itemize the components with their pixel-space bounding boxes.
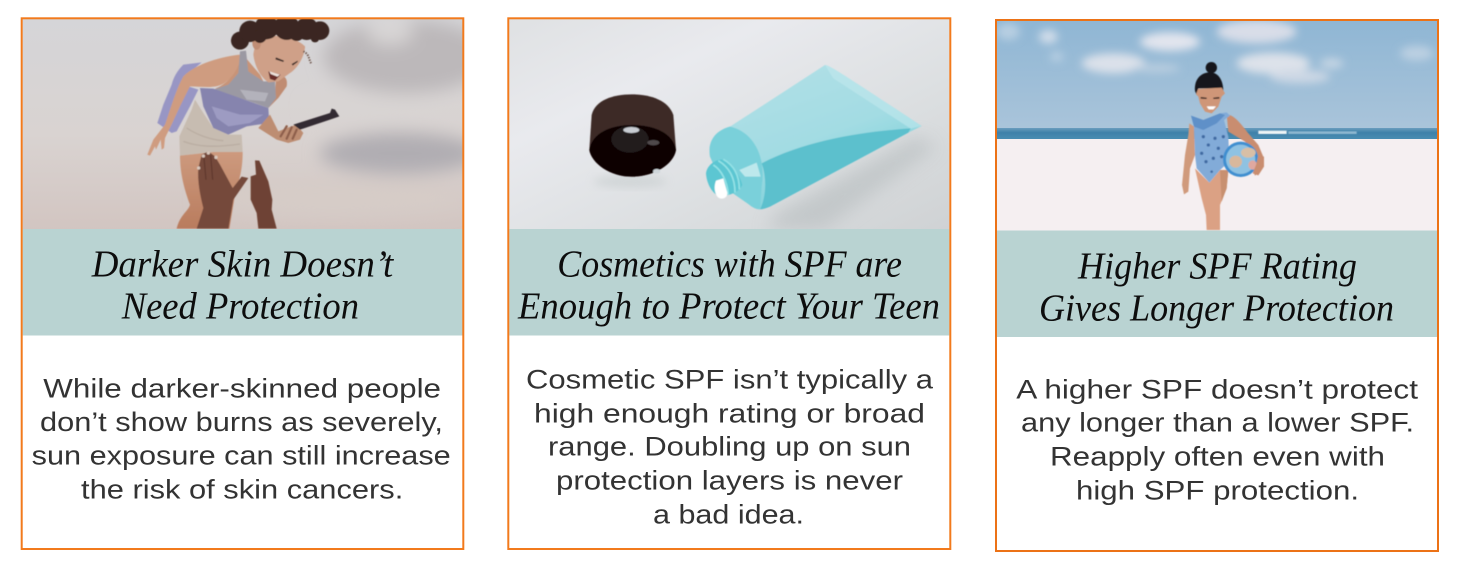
photo: smiling girl on the beach with a ball	[997, 20, 1438, 231]
body text: higher SPF	[1016, 374, 1419, 506]
panel: higher SPF myth	[996, 20, 1438, 551]
heading: cosmetics with SPF: Cosmetics with SPF are	[557, 244, 902, 286]
body text: darker skin: sun exposure can still increase	[32, 440, 451, 470]
card border	[996, 20, 1438, 551]
heading: cosmetics with SPF: Enough to Protect Your Teen	[517, 286, 940, 328]
body text: darker skin: While darker-skinned people	[43, 373, 441, 403]
photo: laughing child lifted by an adult's hands	[22, 15, 490, 230]
heading band	[509, 229, 949, 336]
heading band	[23, 229, 463, 336]
body text: cosmetics with SPF: protection layers is never	[556, 465, 903, 495]
body text: cosmetics with SPF: high enough rating or broad	[534, 398, 925, 428]
heading: darker skin: Darker Skin Doesn’t	[91, 244, 395, 286]
heading: higher SPF: Higher SPF Rating	[1077, 245, 1357, 287]
card border	[22, 18, 463, 549]
heading: cosmetics with SPF	[517, 244, 940, 328]
heading: darker skin: Need Protection	[121, 285, 359, 327]
body text: cosmetics with SPF: range. Doubling up on sun	[548, 432, 911, 462]
body text: cosmetics with SPF: Cosmetic SPF isn’t typically a	[526, 364, 933, 394]
card border	[508, 18, 950, 549]
body text: higher SPF: Reapply often even with	[1050, 442, 1385, 472]
body text: darker skin	[32, 373, 451, 504]
body text: cosmetics with SPF: a bad idea.	[653, 499, 804, 529]
heading: higher SPF: Gives Longer Protection	[1039, 288, 1394, 330]
body text: darker skin: the risk of skin cancers.	[81, 474, 403, 504]
body text: darker skin: don’t show burns as severely,	[40, 407, 443, 437]
heading: darker skin	[91, 244, 395, 327]
body text: cosmetics with SPF	[526, 364, 933, 529]
body text: higher SPF: A higher SPF doesn’t protect	[1016, 374, 1419, 404]
panel: darker skin myth	[22, 15, 490, 549]
heading band	[997, 230, 1437, 337]
heading: higher SPF	[1039, 245, 1394, 330]
body text: higher SPF: high SPF protection.	[1076, 476, 1359, 506]
photo: sunscreen tube and open cap	[509, 18, 951, 230]
panel: cosmetics with SPF myth	[508, 18, 951, 549]
body text: higher SPF: any longer than a lower SPF.	[1021, 408, 1414, 438]
